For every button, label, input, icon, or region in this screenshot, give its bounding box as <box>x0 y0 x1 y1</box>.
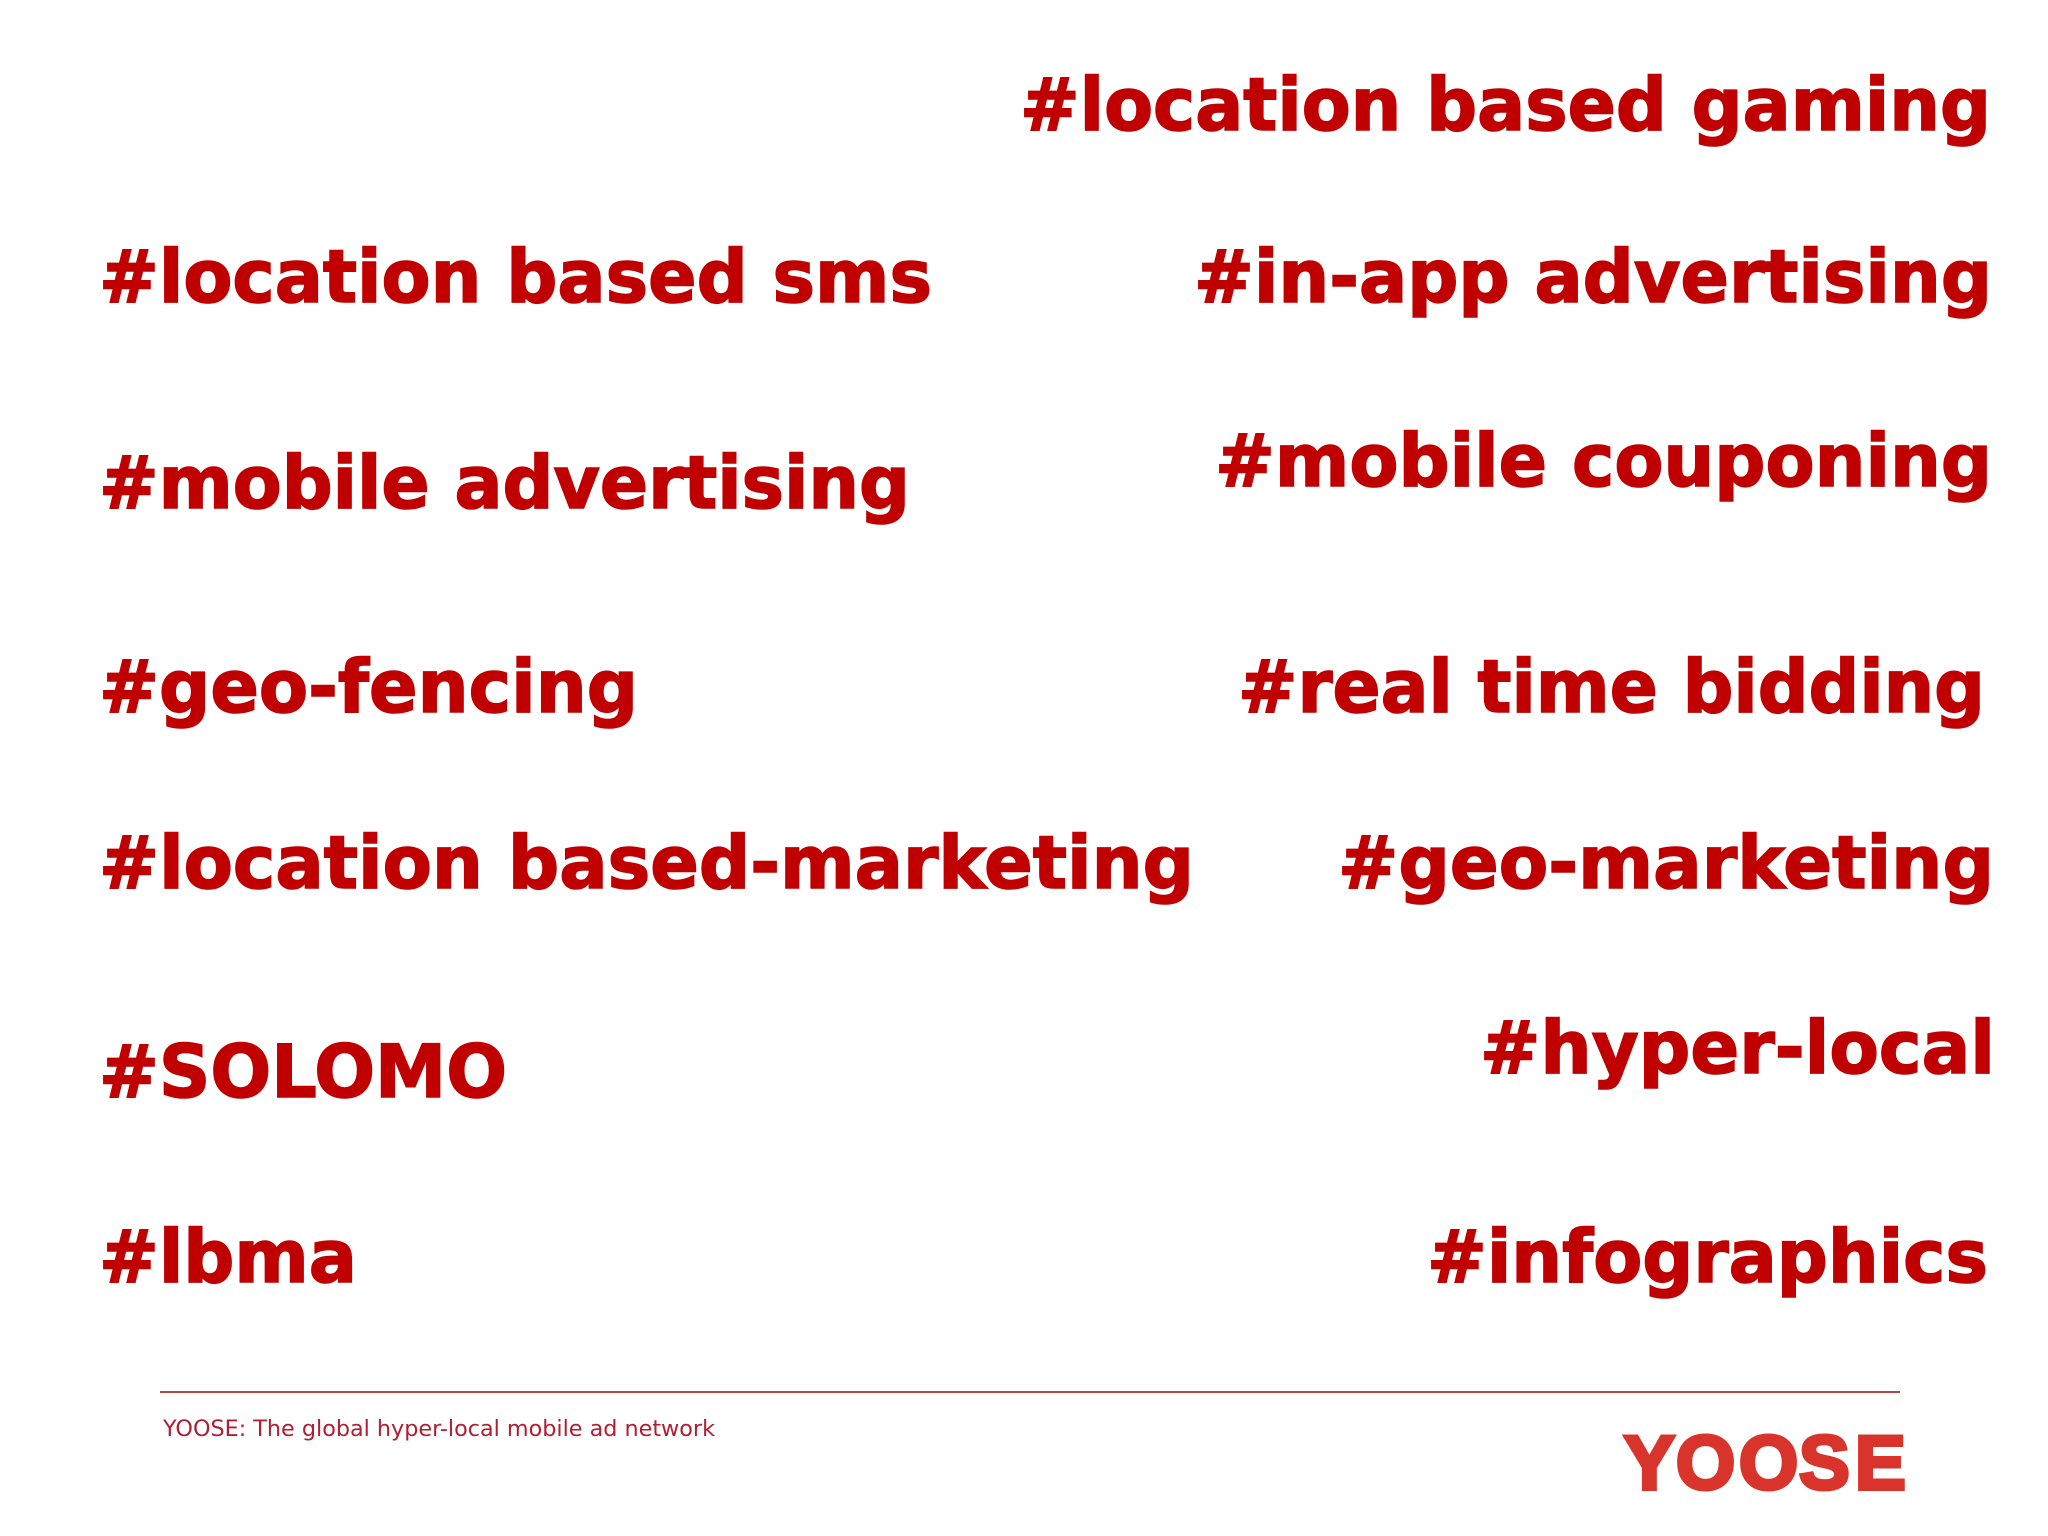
hashtag: SOLOMO: #SOLOMO <box>99 1030 507 1115</box>
hashtag: location based gaming: #location based gaming <box>1020 63 1991 148</box>
logo: YOOSE: YOOSE <box>1624 1421 1906 1506</box>
footer tagline: YOOSE: The global hyper-local mobile ad network <box>162 1417 715 1442</box>
hashtag: geo-fencing: #geo-fencing <box>99 645 638 730</box>
hashtag: location based sms: #location based sms <box>99 235 932 320</box>
hashtag: infographics: #infographics <box>1427 1215 1988 1300</box>
hashtag: location based-marketing: #location based-marketing <box>99 821 1194 906</box>
hashtag: in-app advertising: #in-app advertising <box>1194 235 1992 320</box>
hashtag: mobile couponing: #mobile couponing <box>1215 419 1992 504</box>
hashtag: geo-marketing: #geo-marketing <box>1338 821 1994 906</box>
hashtag: hyper-local: #hyper-local <box>1480 1006 1995 1091</box>
hashtag: lbma: #lbma <box>99 1215 357 1300</box>
hashtag: mobile advertising: #mobile advertising <box>99 441 910 526</box>
hashtag: real time bidding: #real time bidding <box>1238 645 1985 730</box>
